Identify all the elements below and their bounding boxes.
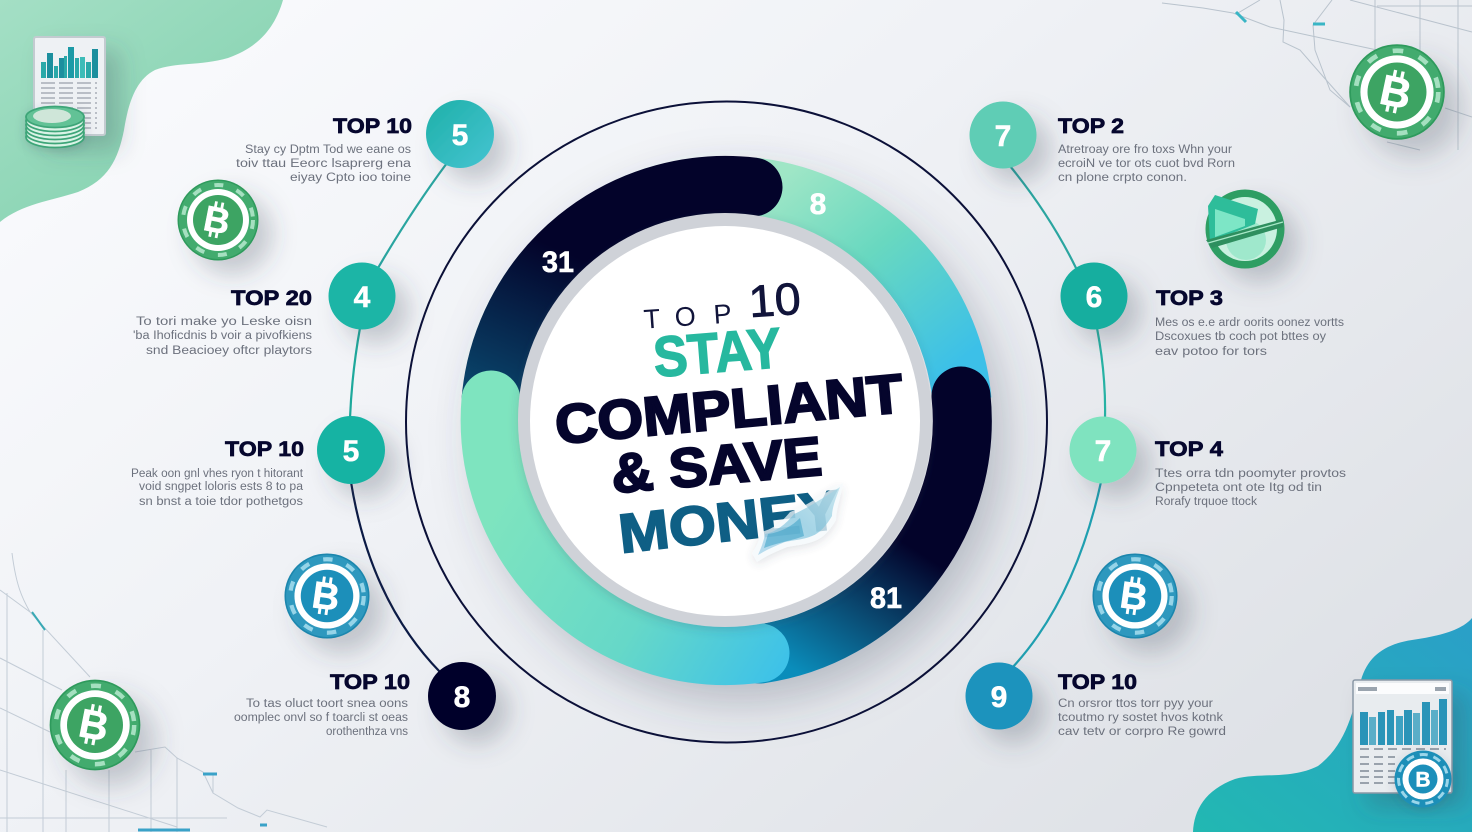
description: Ttes orra tdn poomyter provtos	[1155, 468, 1346, 480]
center disc	[518, 213, 932, 627]
teal blob bottom right	[1193, 618, 1472, 832]
description	[1058, 698, 1226, 738]
node 4: 4	[354, 281, 371, 314]
node 9	[966, 662, 1032, 730]
title: and save: & SAVE	[609, 425, 824, 505]
report sheet	[1353, 680, 1452, 793]
donut ring chart	[462, 156, 990, 684]
description: Stay cy Dptm Tod we eane os	[245, 144, 411, 156]
description: Rorafy trquoe ttock	[1155, 496, 1257, 508]
heading: TOP 20	[231, 287, 312, 310]
heading: TOP 10	[330, 671, 410, 694]
report coin: B	[1415, 768, 1431, 792]
segment: navy right	[760, 396, 962, 654]
value 8: 8	[810, 188, 826, 221]
icon: banknote coin right	[1206, 190, 1284, 268]
node 4	[328, 262, 396, 330]
node 9: 9	[991, 681, 1007, 714]
table rows	[41, 83, 97, 128]
chart lines bottom left	[0, 553, 327, 832]
heading: TOP 4	[1155, 438, 1223, 461]
segment: mint bottom left	[490, 400, 760, 656]
description: eav potoo for tors	[1155, 346, 1267, 358]
ring shadow base	[462, 156, 990, 684]
node 5 middle left	[317, 416, 385, 484]
description: toiv ttau Eeorc lsaprerg ena	[236, 158, 412, 170]
title: compliant: COMPLIANT	[552, 362, 906, 456]
description	[1058, 144, 1235, 184]
description: Dscoxues tb coch pot bttes oy	[1155, 331, 1326, 343]
value 81: 81	[870, 582, 902, 615]
description: 'ba Ihoficdnis b voir a pivofkiens	[133, 330, 312, 342]
segment: mint top right	[753, 187, 962, 400]
description: void sngpet loloris ests 8 to pa	[139, 481, 304, 493]
icon: green coin upper right	[1349, 44, 1445, 140]
white face	[530, 226, 920, 616]
icon: report with coin bottom right	[1353, 680, 1452, 808]
description: Atretroay ore fro toxs Whn your	[1058, 144, 1232, 156]
value 31: 31	[542, 246, 574, 279]
icon: blue coin left: B	[309, 574, 342, 620]
description	[133, 316, 312, 357]
center title	[552, 273, 906, 565]
node 5 upper left: 5	[452, 119, 468, 152]
item: top 2	[1058, 115, 1235, 184]
green blob top left	[0, 0, 283, 222]
node 7 middle right: 7	[1095, 435, 1111, 468]
title: money: MONEY	[615, 478, 843, 565]
icon: blue coin right	[1092, 553, 1178, 639]
description: orothenthza vns	[326, 726, 408, 738]
title: top 10: TOP	[643, 299, 733, 335]
icon: report with coin stack top left	[26, 37, 105, 148]
description: Peak oon gnl vhes ryon t hitorant	[131, 468, 304, 480]
title: top 10: 10	[747, 273, 802, 327]
coin stack	[26, 106, 84, 148]
icon: blue coin left	[284, 553, 370, 639]
connector lines right	[1010, 166, 1105, 668]
description: snd Beacioey oftcr playtors	[146, 345, 312, 357]
item: top 3	[1155, 287, 1344, 358]
node 7 upper right: 7	[995, 120, 1011, 153]
description: cav tetv or corpro Re gowrd	[1058, 726, 1226, 738]
heading: TOP 2	[1058, 115, 1124, 138]
item: top 4	[1155, 438, 1346, 508]
node 7 middle right	[1070, 416, 1136, 484]
icon: green coin lower left: B	[75, 699, 113, 750]
node 8: 8	[454, 681, 470, 714]
description	[234, 698, 408, 738]
icon: green coin upper right: B	[1376, 67, 1415, 119]
node 7 upper right	[970, 102, 1036, 168]
description: ecroiN ve tor ots cuot bvd Rorn	[1058, 158, 1235, 170]
description: To tas oluct toort snea oons	[246, 698, 408, 710]
bars	[1360, 699, 1447, 745]
item: top 20	[133, 287, 312, 357]
description: eiyay Cpto ioo toine	[290, 172, 411, 184]
swoosh over money	[752, 483, 843, 562]
node 6: 6	[1086, 281, 1102, 314]
icon: green coin lower left	[50, 680, 140, 770]
connector lines left	[350, 163, 447, 672]
grey rim	[518, 213, 932, 627]
description	[236, 144, 412, 184]
icon: green coin upper left	[178, 180, 258, 260]
node 6	[1060, 262, 1128, 330]
icon: blue coin right: B	[1117, 574, 1150, 620]
item: top 10 upper left	[236, 115, 412, 184]
description: Mes os e.e ardr oorits oonez vortts	[1155, 317, 1344, 329]
description: To tori make yo Leske oisn	[136, 316, 312, 328]
node 5 middle left: 5	[343, 435, 359, 468]
description: tcoutmo ry sostet hvos kotnk	[1058, 712, 1223, 724]
title: top 10	[641, 273, 802, 335]
outer thin circle	[406, 102, 1047, 742]
description: Cn orsror ttos torr pyy your	[1058, 698, 1213, 710]
description	[1155, 468, 1346, 508]
description: cn plone crpto conon.	[1058, 172, 1187, 184]
heading: TOP 3	[1156, 287, 1223, 310]
description: oomplec onvl so f toarcli st oeas	[234, 712, 408, 724]
bars	[41, 47, 98, 78]
heading: TOP 10	[1058, 671, 1137, 694]
description	[131, 468, 304, 508]
node 5 upper left	[426, 100, 494, 168]
title: stay: STAY	[651, 316, 784, 390]
table rows	[1360, 749, 1446, 783]
description	[1155, 317, 1344, 358]
description: sn bnst a toie tdor pothetgos	[139, 496, 303, 508]
report sheet	[34, 37, 105, 135]
description: Cpnpeteta ont ote Itg od tin	[1155, 482, 1322, 494]
item: top 10 lower right	[1058, 671, 1226, 738]
item: top 10 middle left	[131, 438, 304, 508]
heading: TOP 10	[333, 115, 412, 138]
segment: navy top left	[491, 185, 753, 400]
item: top 10 lower left	[234, 671, 410, 738]
heading: TOP 10	[225, 438, 304, 461]
icon: green coin upper left: B	[200, 197, 234, 242]
node 8	[428, 662, 496, 730]
network lines top right	[1162, 0, 1472, 150]
